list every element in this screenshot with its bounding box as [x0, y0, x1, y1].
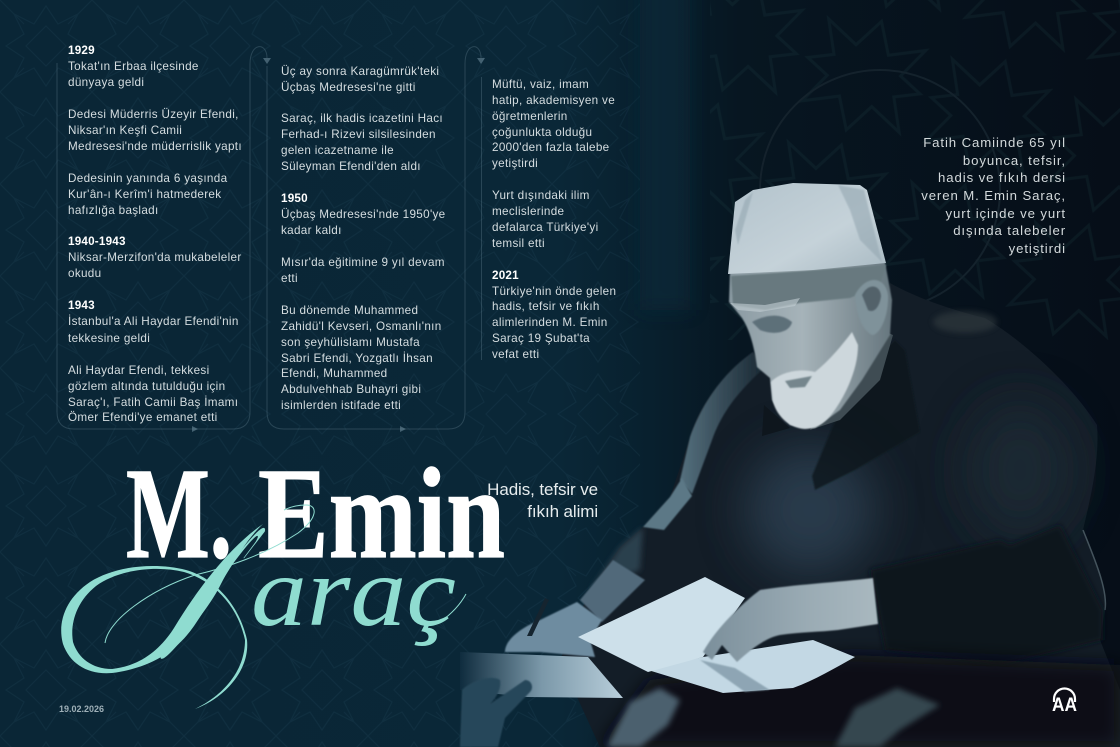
pen [527, 598, 549, 636]
entry 1929: Niksar'ın Keşfi Camii [68, 124, 182, 137]
entry students: öğretmenlerin [492, 110, 568, 123]
ear inner [862, 286, 881, 311]
brow [730, 298, 800, 312]
left sleeve [580, 560, 645, 622]
panel: timeline connector lines and arrows [57, 47, 485, 432]
entry students: Yurt dışındaki ilim [492, 189, 590, 202]
open book lower page [648, 640, 855, 693]
entry 1950: Zahidü'l Kevseri, Osmanlı'nın [281, 320, 442, 333]
mouth [785, 376, 812, 388]
entry Üçbaş Medresesi: gelen icazetname ile [281, 144, 394, 157]
entry 1929: Tokat'ın Erbaa ilçesinde [68, 60, 199, 73]
entry 1950: Efendi, Muhammed [281, 367, 387, 380]
left hand [505, 602, 602, 657]
entry 1950: Üçbaş Medresesi'nde 1950'ye [281, 208, 445, 221]
text block: summary at right: yurt içinde ve yurt [946, 206, 1066, 221]
lower body dark [600, 655, 1120, 747]
icon: AA logo: AA [1052, 695, 1077, 716]
subtitle: fıkıh alimi [527, 502, 598, 521]
entry 2021: Saraç 19 Şubat'ta [492, 332, 590, 345]
entry 1950 [281, 192, 445, 412]
neck [810, 320, 893, 430]
entry students [492, 78, 615, 250]
panel: timeline column 1 [68, 44, 242, 424]
entry Üçbaş Medresesi: Süleyman Efendi'den aldı [281, 160, 421, 173]
open book upper page [578, 577, 745, 672]
title: Saraç in teal script: araç [251, 536, 456, 647]
coat right shoulder tint [933, 311, 997, 333]
entry 1943 [68, 299, 239, 424]
title: Saraç in teal script [61, 483, 466, 709]
title: M. Emin: Emin [258, 442, 505, 586]
entry 2021: Türkiye'nin önde gelen [492, 285, 616, 298]
panel: timeline column 3 [492, 78, 616, 361]
lower left hand [460, 678, 532, 747]
entry 1929: Medresesi'nde müderrislik yaptı [68, 140, 242, 153]
entry students: defalarca Türkiye'yi [492, 221, 599, 234]
right hand [703, 578, 878, 662]
entry students: yetiştirdi [492, 157, 538, 170]
text block: summary at right: hadis ve fıkıh dersi [938, 170, 1066, 185]
text block: summary at right: Fatih Camiinde 65 yıl [923, 135, 1066, 150]
coat lapel [812, 340, 920, 490]
entry 2021: 2021 [492, 269, 519, 282]
left paper [460, 652, 623, 698]
entry Üçbaş Medresesi: Üçbaş Medresesi'ne gitti [281, 81, 416, 94]
text block: summary at right: yetiştirdi [1009, 241, 1066, 256]
flourish: main swash [61, 524, 263, 709]
flourish: c tail [440, 594, 466, 622]
face [729, 262, 892, 428]
entry Üçbaş Medresesi [281, 65, 443, 173]
hairline [731, 265, 886, 310]
coat left shoulder highlight [680, 352, 762, 494]
eye shadow [752, 316, 792, 333]
entry 1950: Abdulvehhab Buhayri gibi [281, 383, 421, 396]
entry 1943: Ömer Efendi'ye emanet etti [68, 411, 218, 424]
entry 1943: Saraç'ı, Fatih Camii Baş İmamı [68, 396, 238, 409]
coat chest light [745, 445, 875, 575]
entry 1929 [68, 44, 242, 217]
text block: summary at right [921, 135, 1066, 256]
entry 1929: dünyaya geldi [68, 76, 144, 89]
entry 1950: 1950 [281, 192, 308, 205]
entry 1950: kadar kaldı [281, 224, 342, 237]
title: Saraç in teal script: S [126, 483, 302, 700]
entry 2021: alimlerinden M. Emin [492, 316, 608, 329]
left knee highlight [607, 688, 680, 747]
entry 1929: Dedesinin yanında 6 yaşında [68, 172, 228, 185]
entry students: 2000'den fazla talebe [492, 141, 609, 154]
subtitle: Hadis, tefsir ve [487, 480, 598, 499]
beard [771, 332, 858, 429]
entry 1940-1943 [68, 235, 242, 280]
date: 19.02.2026 [59, 704, 104, 714]
text block: summary at right: boyunca, tefsir, [963, 153, 1066, 168]
entry students: çoğunlukta olduğu [492, 126, 592, 139]
entry 1943: tekkesine geldi [68, 332, 150, 345]
entry 2021: hadis, tefsir ve fıkıh [492, 300, 600, 313]
left arm shade [590, 527, 643, 590]
panel: timeline column 2 [281, 65, 445, 412]
entry 1929: hafızlığa başladı [68, 204, 159, 217]
entry 2021 [492, 269, 616, 361]
entry Üçbaş Medresesi: Ferhad-ı Rizevi silsilesinden [281, 128, 436, 141]
entry 2021: vefat etti [492, 348, 539, 361]
entry 1943: Ali Haydar Efendi, tekkesi [68, 364, 210, 377]
entry Üçbaş Medresesi: Üç ay sonra Karagümrük'teki [281, 65, 439, 78]
left arm highlight [643, 478, 692, 530]
entry students: meclislerinde [492, 205, 564, 218]
hat [728, 183, 886, 274]
subtitle [487, 480, 598, 521]
entry 1929: Dedesi Müderris Üzeyir Efendi, [68, 108, 239, 121]
book shadow [700, 660, 770, 692]
entry 1943: gözlem altında tutulduğu için [68, 380, 225, 393]
entry 1950: Sabri Efendi, Yozgatlı İhsan [281, 352, 433, 365]
right knee highlight [835, 688, 940, 747]
entry 1950: isimlerden istifade etti [281, 399, 401, 412]
entry 1929: 1929 [68, 44, 95, 57]
title: M. Emin: M. [126, 442, 232, 586]
entry Üçbaş Medresesi: Saraç, ilk hadis icazetini Hacı [281, 112, 443, 125]
entry 1950: Mısır'da eğitimine 9 yıl devam [281, 256, 445, 269]
coat right edge highlight [1083, 530, 1105, 610]
entry 1950: Bu dönemde Muhammed [281, 304, 418, 317]
text block: summary at right: dışında talebeler [953, 223, 1066, 238]
entry 1950: etti [281, 272, 298, 285]
photo: elderly scholar reading [460, 183, 1120, 747]
coat sleeve dark [870, 525, 1103, 665]
entry students: temsil etti [492, 237, 545, 250]
entry students: hatip, akademisyen ve [492, 94, 615, 107]
title: M. Emin [126, 442, 505, 586]
entry 1929: Kur'ân-ı Kerîm'i hatmederek [68, 188, 221, 201]
coat body [560, 283, 1120, 747]
text block: summary at right: veren M. Emin Saraç, [921, 188, 1066, 203]
coat right side light [965, 400, 1075, 540]
entry 1950: son şeyhülislamı Mustafa [281, 336, 420, 349]
hat folds [735, 185, 882, 262]
coat collar left [762, 405, 790, 436]
entry 1940-1943: Niksar-Merzifon'da mukabeleler [68, 251, 242, 264]
ear [855, 280, 888, 335]
entry 1940-1943: okudu [68, 267, 101, 280]
entry 1943: İstanbul'a Ali Haydar Efendi'nin [68, 315, 239, 328]
entry students: Müftü, vaiz, imam [492, 78, 589, 91]
flourish: thin loop [105, 505, 314, 643]
entry 1943: 1943 [68, 299, 95, 312]
entry 1940-1943: 1940-1943 [68, 235, 126, 248]
